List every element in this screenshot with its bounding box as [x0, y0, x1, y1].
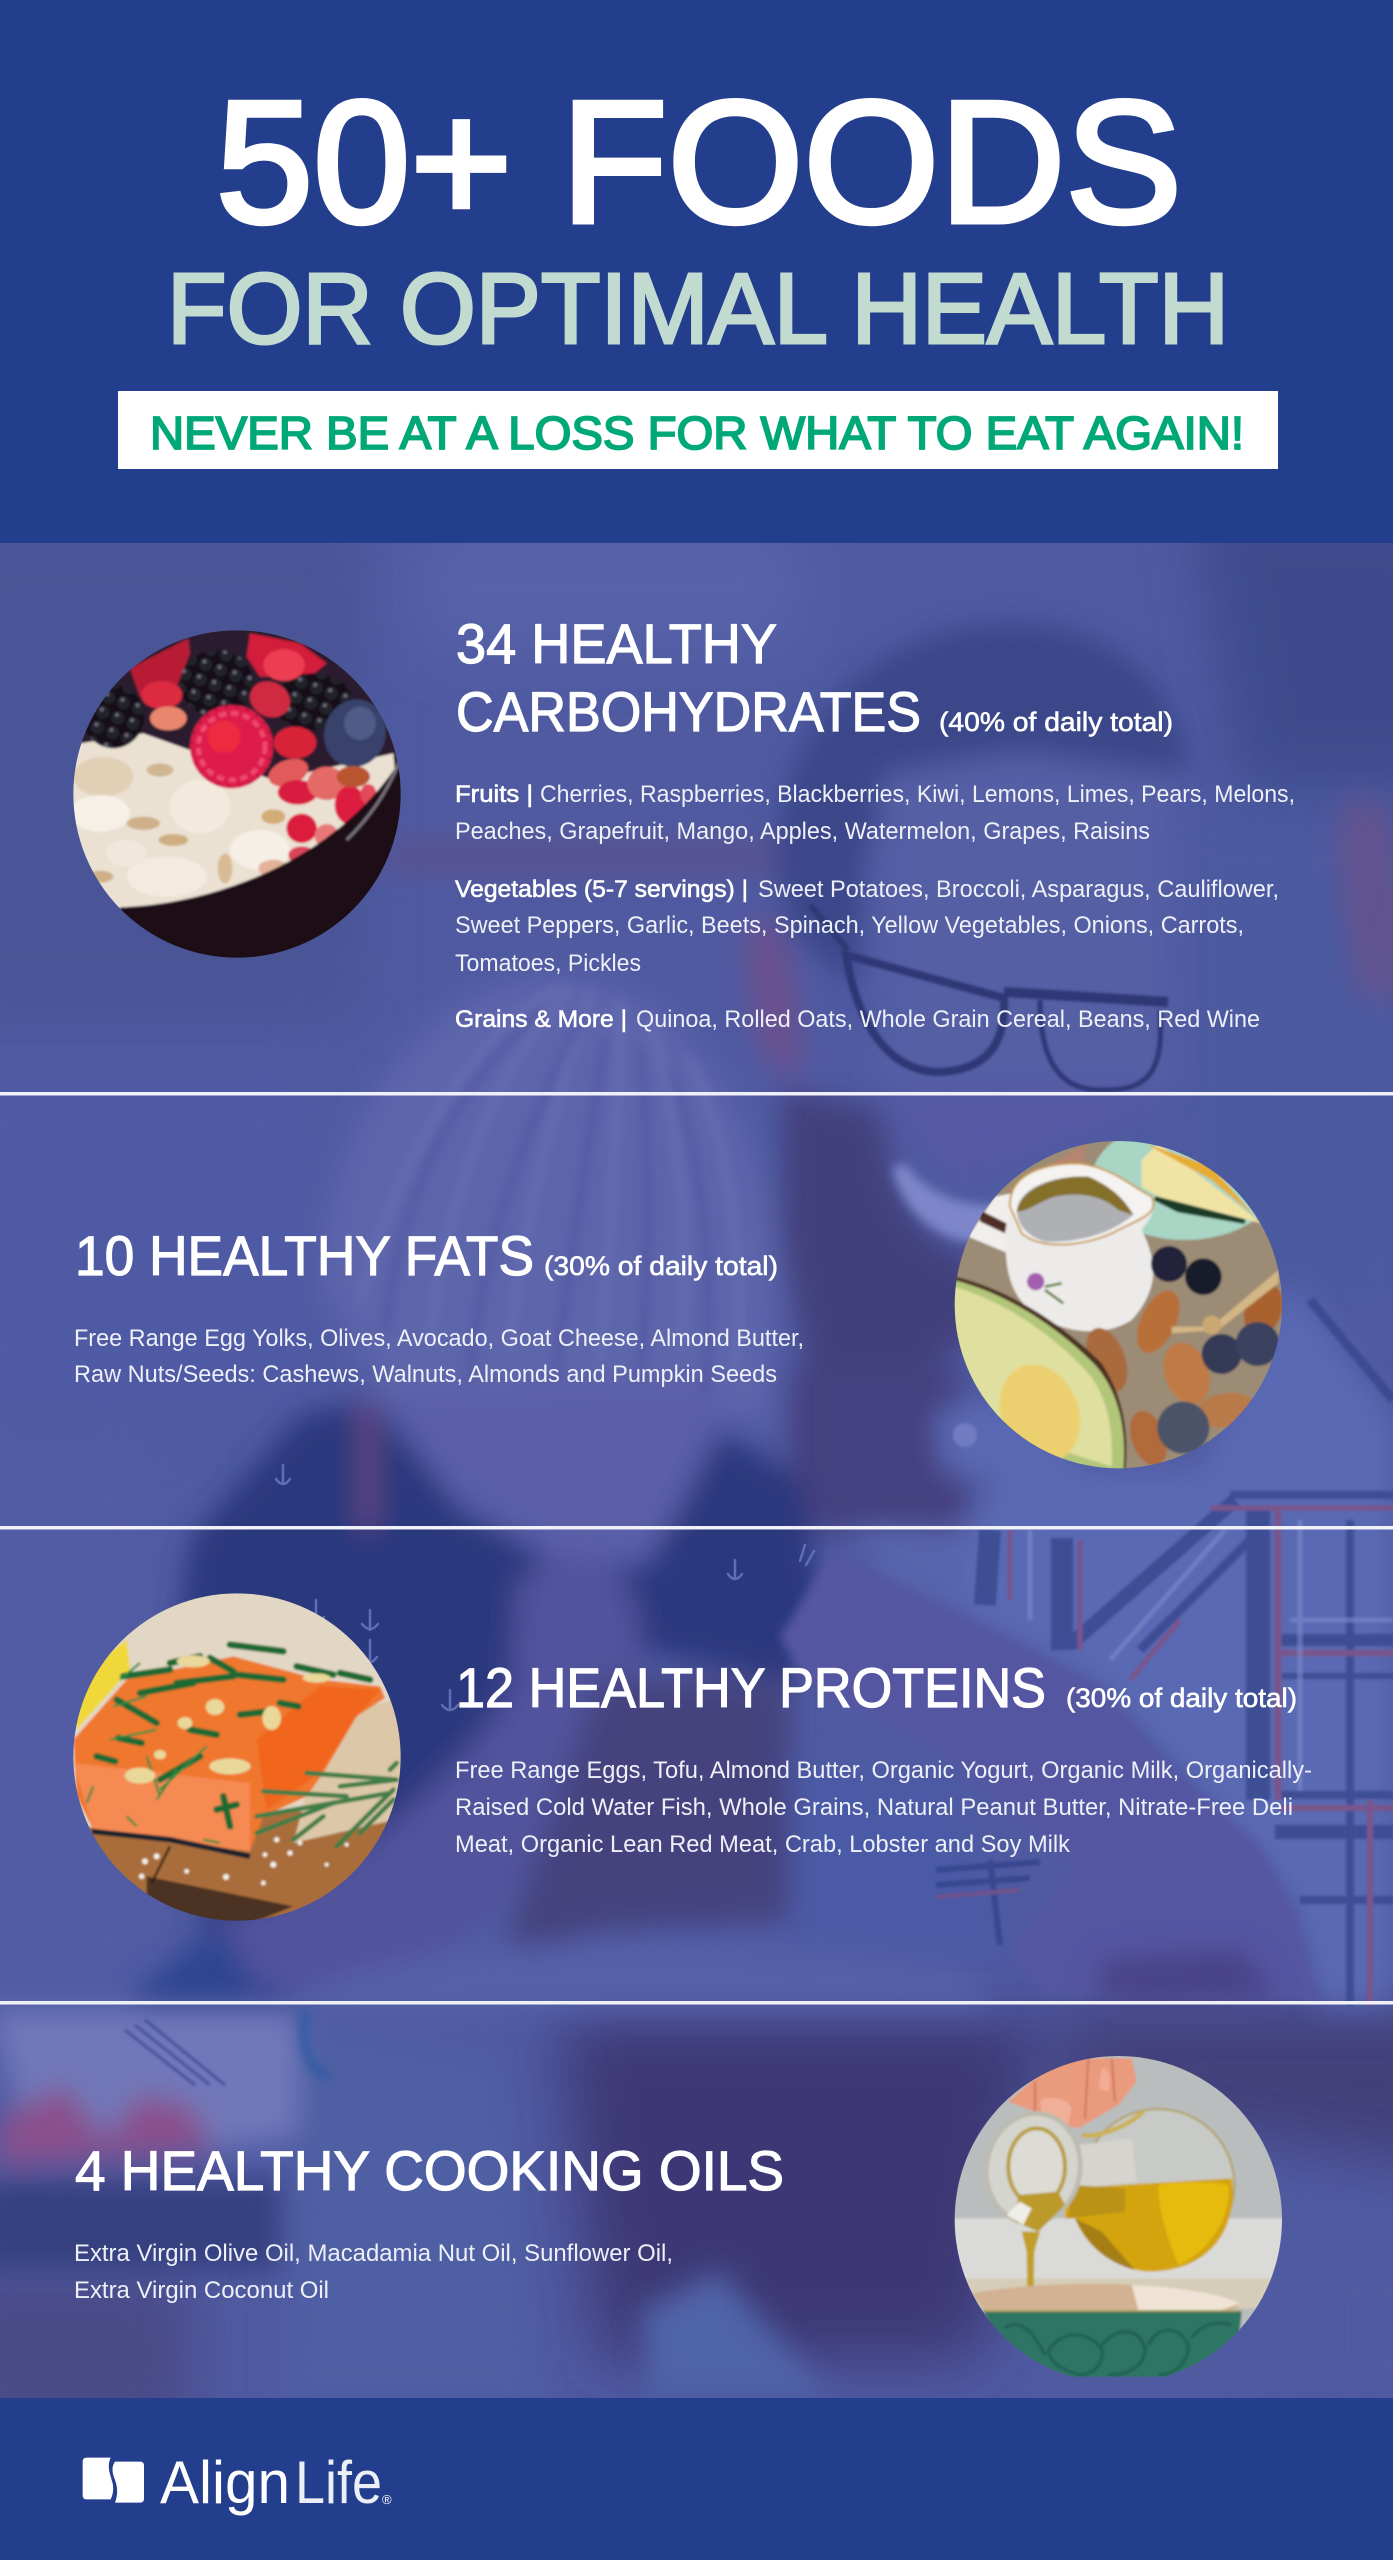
food list: [74, 2240, 673, 2304]
mouth of bottle: [978, 2106, 1089, 2231]
heading: 12 HEALTHY PROTEINS: [456, 1656, 1046, 1719]
food photo: oil poured from a glass jug: [945, 2045, 1295, 2395]
footer band: [0, 2398, 1393, 2560]
panel: carbohydrates: [60, 612, 1295, 1033]
bowl: [972, 2284, 1240, 2312]
decorative: collar strip: [362, 1400, 374, 1530]
decorative: boy's hair: [320, 976, 775, 1420]
food list: Free Range Eggs, Tofu, Almond Butter, Organic Yogurt, Organic Milk, Organically-: [455, 1757, 1312, 1784]
food list: Sweet Peppers, Garlic, Beets, Spinach, Yellow Vegetables, Onions, Carrots,: [455, 912, 1244, 939]
food list: [455, 1757, 1312, 1858]
heading: [456, 612, 1173, 743]
food list: Free Range Egg Yolks, Olives, Avocado, Goat Cheese, Almond Butter,: [74, 1325, 804, 1352]
fingers: [1008, 2058, 1137, 2128]
decorative: fork on table: [125, 2020, 225, 2085]
decorative: between arms: [500, 1680, 790, 1960]
food list: Quinoa, Rolled Oats, Whole Grain Cereal, Beans, Red Wine: [636, 1006, 1260, 1033]
subtitle: FOR OPTIMAL HEALTH: [167, 253, 1229, 365]
food list: Peaches, Grapefruit, Mango, Apples, Watermelon, Grapes, Raisins: [455, 818, 1150, 845]
header band: [0, 0, 1393, 543]
heading: 4 HEALTHY COOKING OILS: [75, 2139, 784, 2202]
tagline banner: [118, 391, 1278, 469]
food list: Extra Virgin Olive Oil, Macadamia Nut Oil, Sunflower Oil,: [74, 2240, 673, 2267]
logo icon: [83, 2458, 144, 2503]
heading: (30% of daily total): [1066, 1683, 1297, 1713]
decorative: plaid shirt lines: [985, 1300, 1393, 2005]
food list: Extra Virgin Coconut Oil: [74, 2277, 329, 2304]
decorative: boy hair strands: [360, 985, 738, 1390]
herbs: [97, 1645, 370, 1826]
decorative: room band: [390, 842, 775, 872]
heading: 34 HEALTHY: [456, 612, 777, 675]
panel: fats: [74, 1120, 1295, 1480]
food list: Cherries, Raspberries, Blackberries, Kiwi, Lemons, Limes, Pears, Melons,: [540, 781, 1295, 808]
decorative: right ear: [1338, 795, 1393, 1000]
decorative: boy face: [405, 1430, 721, 1566]
panel: cooking oils: [74, 2045, 1295, 2395]
food list: Raw Nuts/Seeds: Cashews, Walnuts, Almonds and Pumpkin Seeds: [74, 1361, 777, 1388]
food photo: olive oil, avocado and almonds: [945, 1120, 1295, 1480]
heading: 10 HEALTHY FATS: [75, 1224, 534, 1287]
decorative: boy shirt: [170, 1400, 830, 1960]
decorative: boy arm and hand: [215, 1558, 640, 1990]
food list: Grains & More |: [455, 1006, 627, 1033]
decorative: forehead and cheeks: [872, 772, 1158, 1073]
salmon: [73, 1656, 385, 1851]
rosemary: [257, 1763, 397, 1846]
avocado: [955, 1277, 1126, 1480]
logo wordmark: Align: [160, 2449, 290, 2516]
title: 50+ FOODS: [216, 64, 1182, 259]
food list: Tomatoes, Pickles: [455, 950, 641, 977]
food list: Sweet Potatoes, Broccoli, Asparagus, Cauliflower,: [758, 876, 1279, 903]
bowl: [373, 787, 408, 868]
AlignLife logo: Life: [295, 2449, 382, 2516]
decorative: hand shadow: [1100, 1950, 1280, 2000]
food list: [455, 781, 1295, 1033]
jug: [968, 1193, 1012, 1253]
food list: Raised Cold Water Fish, Whole Grains, Natural Peanut Butter, Nitrate-Free Deli: [455, 1794, 1293, 1821]
panel: proteins: [60, 1583, 1312, 1933]
decorative: man's arm over plaid: [780, 1550, 1319, 2001]
decorative: pocket plaid: [936, 1860, 1040, 1945]
divider lines: [0, 1092, 1393, 2004]
AlignLife logo: ®: [382, 2492, 392, 2507]
bottle: [1082, 2109, 1234, 2261]
decorative: shirt anchors: [276, 1465, 814, 1710]
food list: Meat, Organic Lean Red Meat, Crab, Lobster and Soy Milk: [455, 1831, 1071, 1858]
decorative: man's light shirt: [863, 1517, 958, 1600]
background photo: father and son, blue tint: [0, 500, 1393, 2430]
food list: Fruits |: [455, 781, 533, 808]
heading: CARBOHYDRATES: [456, 680, 921, 743]
food list: [74, 1325, 804, 1388]
decorative: button: [953, 1423, 977, 1447]
decorative: plaid base: [935, 1280, 1393, 2005]
decorative: cheeks lower: [926, 1116, 1091, 1121]
decorative: man's hair: [775, 623, 1190, 990]
almonds and berries: [1129, 1284, 1188, 1359]
decorative: plate top left: [0, 2010, 340, 2150]
food photo: salmon with herbs: [60, 1583, 410, 1933]
AlignLife logo: [83, 2449, 392, 2516]
decorative: teeth: [892, 1163, 1005, 1243]
decorative: beard: [772, 1083, 965, 1380]
decorative: glasses: [810, 905, 1168, 1090]
berries: [130, 638, 190, 697]
heading: (30% of daily total): [544, 1251, 778, 1281]
tagline banner: NEVER BE AT A LOSS FOR WHAT TO EAT AGAIN!: [150, 407, 1244, 459]
heading: (40% of daily total): [939, 707, 1173, 737]
heading: [75, 1224, 778, 1287]
decorative: plate foreground: [295, 1943, 1000, 2010]
decorative: left ear: [747, 919, 800, 1076]
food photo: oatmeal with berries: [60, 620, 413, 973]
food list: Vegetables (5-7 servings) |: [455, 876, 748, 903]
